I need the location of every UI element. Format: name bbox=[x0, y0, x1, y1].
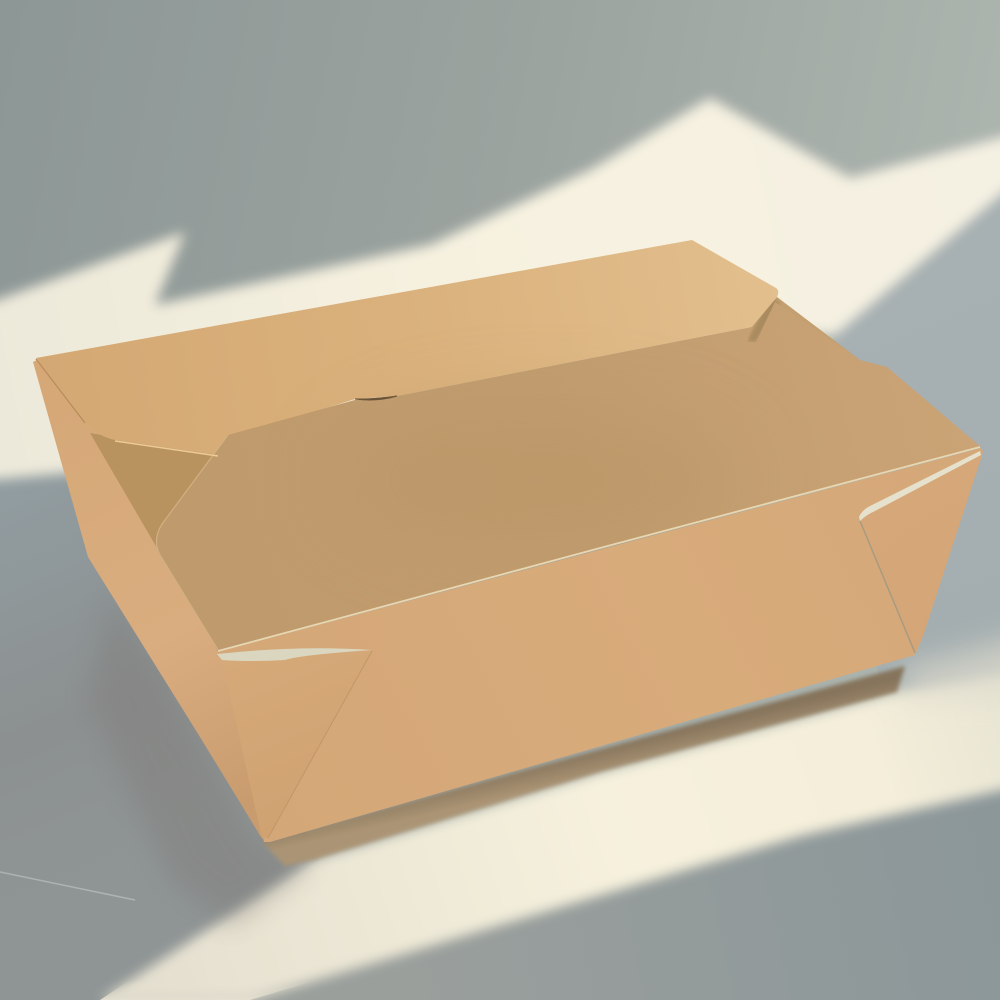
shadow cast to the left of the box bbox=[90, 590, 313, 925]
faint line on the floor bbox=[0, 872, 135, 900]
soft glow under right corner bbox=[900, 615, 1000, 700]
left side panel bbox=[33, 360, 270, 842]
slit shadow beside rear flap bbox=[747, 296, 780, 342]
lid left corner edge bbox=[156, 435, 228, 650]
left corner flap bbox=[222, 651, 372, 838]
tucked flap behind lid bbox=[740, 297, 860, 360]
left flap fold line bbox=[268, 651, 372, 838]
rear flap left edge line bbox=[36, 359, 85, 423]
lid soft shading bbox=[340, 410, 740, 550]
front lid panel bbox=[156, 302, 981, 650]
right flap edge line bbox=[860, 521, 915, 653]
right corner flap bbox=[860, 452, 983, 653]
rear lid flap bbox=[36, 240, 778, 455]
right corner slot highlight bbox=[859, 451, 981, 521]
upper sunlight patch bbox=[0, 98, 1000, 488]
rear flap lower edge highlight bbox=[115, 441, 218, 456]
box: kraft takeaway container bbox=[33, 240, 983, 842]
lower sunlight patch bbox=[100, 640, 1000, 1000]
front panel bbox=[217, 448, 983, 842]
inner corner fold bbox=[90, 433, 218, 548]
lid crease highlight bbox=[218, 447, 980, 651]
tab notch bbox=[355, 396, 397, 400]
left corner slot highlight bbox=[217, 648, 372, 661]
box shadow on surface bbox=[262, 666, 905, 866]
